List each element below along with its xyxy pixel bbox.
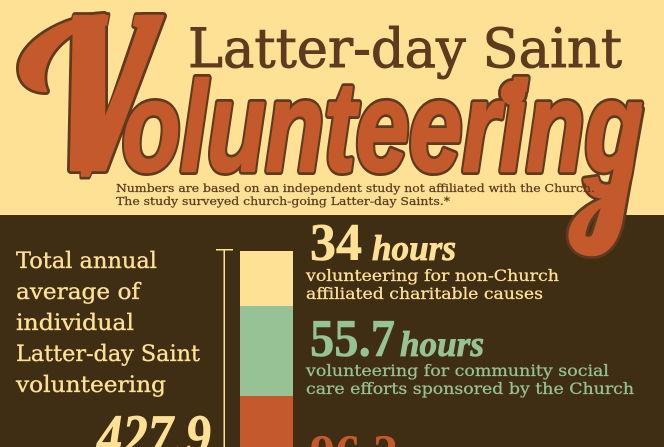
stat: 55.7 hours: care efforts sponsored by the Church bbox=[306, 379, 634, 398]
title: Volunteering bbox=[20, 0, 643, 255]
stat: 34 hours: hours bbox=[372, 228, 456, 268]
stat: 55.7 hours: hours bbox=[400, 324, 484, 364]
total label: Total annual bbox=[16, 249, 157, 274]
total label: individual bbox=[16, 311, 134, 336]
subtitle: Latter-day Saint: Latter-day Saint bbox=[188, 17, 622, 80]
total label: average of bbox=[16, 280, 142, 305]
stat: 55.7 hours: volunteering for community social bbox=[305, 361, 609, 380]
study note bbox=[116, 181, 595, 208]
total label bbox=[15, 249, 200, 398]
stat: 55.7 hours bbox=[305, 310, 634, 398]
total label: Latter-day Saint bbox=[16, 342, 200, 367]
stat: 55.7 hours: 55.7 bbox=[310, 310, 395, 368]
stat: 34 hours bbox=[305, 214, 559, 303]
stat: 34 hours: 34 bbox=[310, 214, 362, 272]
stat: 34 hours: affiliated charitable causes bbox=[306, 284, 543, 303]
total label: volunteering bbox=[15, 373, 166, 398]
dark lower panel bbox=[0, 215, 664, 447]
stat: 34 hours: volunteering for non-Church bbox=[305, 266, 559, 285]
study note: Numbers are based on an independent study not affiliated with the Church. bbox=[116, 181, 595, 195]
scale bracket bbox=[216, 249, 233, 447]
stacked bar bbox=[240, 251, 293, 447]
study note: The study surveyed church-going Latter-day Saints.* bbox=[116, 194, 450, 208]
